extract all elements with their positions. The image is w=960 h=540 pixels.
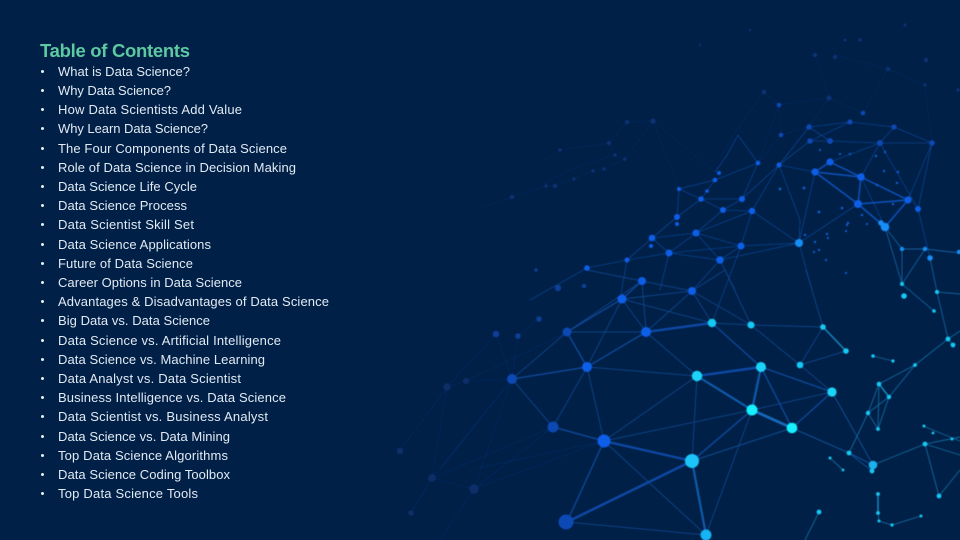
- faint upper network lines: [480, 55, 932, 208]
- table of contents list: Data Scientist Skill Set: [58, 217, 194, 232]
- table of contents list: Big Data vs. Data Science: [58, 313, 210, 328]
- right cluster lines: [805, 331, 960, 540]
- table of contents list: Top Data Science Algorithms: [58, 448, 228, 463]
- medium lower network lines: [512, 281, 832, 522]
- table of contents list: Why Learn Data Science?: [58, 121, 208, 136]
- table of contents list: The Four Components of Data Science: [58, 141, 287, 156]
- table of contents list: Career Options in Data Science: [58, 275, 242, 290]
- brightest nodes: [746, 404, 797, 433]
- table of contents list: Why Data Science?: [58, 83, 171, 98]
- table of contents list: Data Science Process: [58, 198, 188, 213]
- title: Table of Contents: [40, 40, 190, 61]
- thick lower network lines: [567, 323, 761, 522]
- secondary lines: [692, 392, 873, 471]
- thin lower network lines: [512, 270, 846, 535]
- cyan-blue nodes: [795, 220, 960, 261]
- network illustration: plexus of connected nodes: [396, 15, 960, 540]
- table of contents list: How Data Scientists Add Value: [58, 102, 242, 117]
- table of contents list: What is Data Science?: [58, 64, 190, 79]
- table of contents list: Data Scientist vs. Business Analyst: [58, 409, 268, 424]
- faint lower-left nodes: [396, 378, 479, 516]
- table of contents list: Data Science vs. Machine Learning: [58, 352, 265, 367]
- table of contents list: Advantages & Disadvantages of Data Science: [58, 294, 329, 309]
- table of contents list: Data Analyst vs. Data Scientist: [58, 371, 241, 386]
- table of contents list: Data Science Life Cycle: [58, 179, 197, 194]
- table of contents list: Data Science Applications: [58, 237, 212, 252]
- faint lower-left network lines: [400, 319, 604, 540]
- table of contents list: Future of Data Science: [58, 256, 193, 271]
- mid dim blue nodes: [507, 103, 935, 529]
- right upper connector lines: [885, 227, 960, 339]
- table of contents list: Business Intelligence vs. Data Science: [58, 390, 286, 405]
- table of contents list: Data Science vs. Artificial Intelligence: [58, 333, 281, 348]
- faint upper nodes: [510, 23, 960, 199]
- table of contents list: Role of Data Science in Decision Making: [58, 160, 296, 175]
- blue nodes: [582, 158, 921, 448]
- table of contents list: [41, 64, 329, 501]
- table of contents list: Data Science vs. Data Mining: [58, 429, 230, 444]
- table of contents list: Top Data Science Tools: [58, 486, 198, 501]
- small scattered upper nodes: [779, 149, 899, 274]
- mid-blue upper network lines: [530, 122, 932, 323]
- bright cyan nodes: [685, 282, 955, 540]
- bright-blue upper network thick lines: [815, 162, 908, 227]
- table of contents list: Data Science Coding Toolbox: [58, 467, 230, 482]
